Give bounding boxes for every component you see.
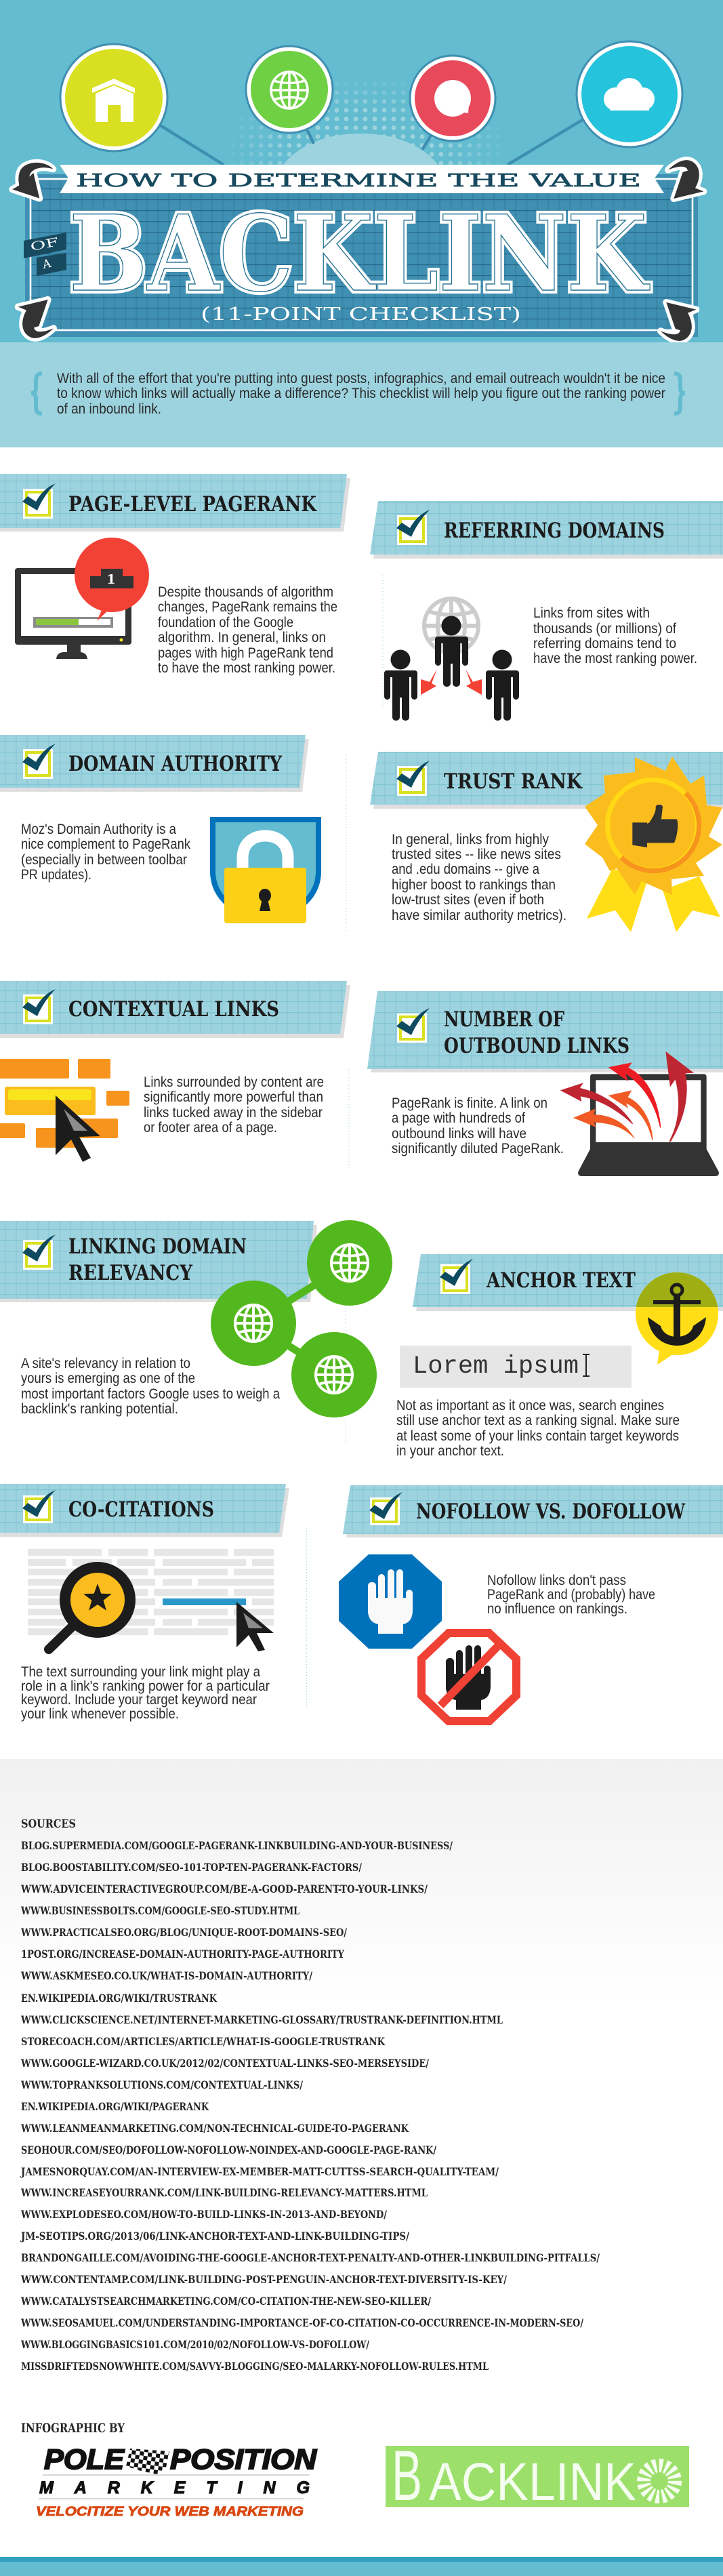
sources list	[20, 1839, 600, 2373]
text block: in your anchor text.	[396, 1443, 504, 1459]
icon: laptop with outbound arrows	[560, 1051, 719, 1176]
text block: PageRank is finite. A link on	[392, 1095, 548, 1111]
sources list: WWW.CONTENTAMP.COM/LINK-BUILDING-POST-PENGUIN-ANCHOR-TEXT-DIVERSITY-IS-KEY/	[20, 2273, 507, 2286]
text block: Not as important as it once was, search engines	[396, 1398, 664, 1413]
text block	[21, 822, 190, 883]
banner	[0, 1221, 317, 1302]
title tag: of a: OF	[29, 235, 60, 254]
text block: Links from sites with	[533, 605, 650, 621]
text block: pages with high PageRank tend	[158, 645, 333, 661]
text block: to have the most ranking power.	[158, 660, 335, 676]
intro text: With all of the effort that you're putting into guest posts, infographics, and email outreach wouldn't it be nice	[57, 371, 665, 386]
sources list: WWW.PRACTICALSEO.ORG/BLOG/UNIQUE-ROOT-DOMAINS-SEO/	[20, 1926, 347, 1939]
sources list: MISSDRIFTEDSNOWWHITE.COM/SAVVY-BLOGGING/SEO-MALARKY-NOFOLLOW-RULES.HTML	[21, 2360, 489, 2373]
intro text	[57, 371, 665, 417]
text block: outbound links will have	[392, 1126, 526, 1142]
text block: changes, PageRank remains the	[158, 599, 337, 615]
banner: PAGE-LEVEL PAGERANK	[68, 492, 317, 517]
sources list: EN.WIKIPEDIA.ORG/WIKI/PAGERANK	[21, 2100, 209, 2113]
panel: trust rank	[370, 752, 723, 932]
text block: your link whenever possible.	[21, 1706, 179, 1722]
panel: anchor text	[396, 1254, 723, 1459]
text block: In general, links from highly	[392, 832, 549, 847]
text block: and .edu domains -- give a	[392, 862, 539, 877]
panel: credits	[21, 2421, 689, 2519]
logo: pole position marketing: POLE	[44, 2443, 125, 2475]
panel: co-citations	[0, 1484, 289, 1722]
text block: low-trust sites (even if both	[392, 892, 544, 908]
banner	[413, 1254, 723, 1311]
text block: have the most ranking power.	[533, 651, 697, 666]
arrow: corner bottom left	[18, 300, 54, 338]
text block: higher boost to rankings than	[392, 877, 556, 893]
text block: Moz's Domain Authority is a	[21, 822, 176, 837]
sources list: EN.WIKIPEDIA.ORG/WIKI/TRUSTRANK	[21, 1992, 217, 2005]
banner: CO-CITATIONS	[68, 1497, 214, 1522]
input mockup: Lorem ipsum	[413, 1352, 579, 1381]
icon: cloud circle	[577, 41, 682, 147]
icon: connected globes	[211, 1220, 392, 1417]
title tag: of a	[24, 233, 66, 276]
banner	[367, 991, 723, 1072]
sources list: WWW.GOOGLE-WIZARD.CO.UK/2012/02/CONTEXTUAL-LINKS-SEO-MERSEYSIDE/	[20, 2057, 429, 2070]
sources list: SEOHOUR.COM/SEO/DOFOLLOW-NOFOLLOW-NOINDEX-AND-GOOGLE-PAGE-RANK/	[21, 2144, 436, 2156]
text block: significantly diluted PageRank.	[392, 1141, 564, 1156]
sources list: WWW.SEOSAMUEL.COM/UNDERSTANDING-IMPORTANCE-OF-CO-CITATION-CO-OCCURRENCE-IN-MODERN-SEO/	[20, 2316, 583, 2329]
sources list: WWW.BLOGGINGBASICS101.COM/2010/02/NOFOLLOW-VS-DOFOLLOW/	[20, 2338, 369, 2351]
sources list: JM-SEOTIPS.ORG/2013/06/LINK-ANCHOR-TEXT-AND-LINK-BUILDING-TIPS/	[20, 2230, 409, 2242]
banner	[0, 735, 309, 792]
sources list: 1POST.ORG/INCREASE-DOMAIN-AUTHORITY-PAGE-AUTHORITY	[21, 1948, 345, 1960]
text block: still use anchor text as a ranking signal. Make sure	[396, 1413, 680, 1428]
icon: shield and padlock	[210, 817, 321, 923]
text block: Despite thousands of algorithm	[158, 584, 333, 600]
banner: RELEVANCY	[68, 1261, 193, 1285]
text block	[21, 1664, 270, 1722]
sources list: BLOG.SUPERMEDIA.COM/GOOGLE-PAGERANK-LINKBUILDING-AND-YOUR-BUSINESS/	[21, 1839, 453, 1852]
sources list: WWW.EXPLODESEO.COM/HOW-TO-BUILD-LINKS-IN-2013-AND-BEYOND/	[20, 2208, 387, 2221]
text block: no influence on rankings.	[487, 1601, 627, 1617]
right brace	[674, 374, 685, 414]
credits heading: INFOGRAPHIC BY	[21, 2421, 125, 2436]
sources list: BLOG.BOOSTABILITY.COM/SEO-101-TOP-TEN-PAGERANK-FACTORS/	[21, 1861, 362, 1874]
text block	[487, 1573, 655, 1617]
icon: anchor bubble	[636, 1272, 718, 1365]
panel: intro	[0, 342, 723, 447]
sources heading: SOURCES	[21, 1817, 76, 1831]
input mockup	[400, 1346, 632, 1388]
icon: chat circle	[410, 56, 495, 141]
arrow: corner top left	[12, 163, 53, 199]
banner	[370, 752, 723, 809]
logo: pole position marketing: POSITION	[170, 2443, 318, 2475]
text block	[392, 832, 566, 923]
text block: nice complement to PageRank	[21, 837, 190, 852]
text block	[21, 1356, 280, 1417]
icon: home circle	[60, 44, 167, 151]
text block	[158, 584, 337, 676]
panel: sources	[0, 1759, 723, 2373]
logo: pole position marketing: VELOCITIZE YOUR WEB MARKETING	[36, 2505, 304, 2519]
icon: text lines with magnifier and cursor	[28, 1549, 274, 1651]
text block	[392, 1095, 564, 1156]
banner	[0, 1484, 289, 1537]
title: backlink: BACKLINK	[69, 193, 650, 315]
sources list: WWW.TOPRANKSOLUTIONS.COM/CONTEXTUAL-LINKS/	[20, 2078, 303, 2091]
sources list: WWW.CLICKSCIENCE.NET/INTERNET-MARKETING-GLOSSARY/TRUSTRANK-DEFINITION.HTML	[20, 2013, 503, 2026]
text block: referring domains tend to	[533, 636, 676, 651]
sources list: WWW.BUSINESSBOLTS.COM/GOOGLE-SEO-STUDY.HTML	[20, 1904, 299, 1917]
panel: number of outbound links	[367, 991, 723, 1176]
text block: thousands (or millions) of	[533, 621, 676, 637]
banner	[370, 501, 723, 559]
icon: content blocks and cursor	[0, 1059, 129, 1162]
banner	[0, 474, 350, 531]
banner: OUTBOUND LINKS	[444, 1034, 629, 1058]
text block	[396, 1398, 680, 1459]
banner: ANCHOR TEXT	[486, 1268, 636, 1293]
banner: CONTEXTUAL LINKS	[68, 997, 279, 1022]
text block: The text surrounding your link might play a	[21, 1664, 260, 1680]
text block	[144, 1074, 324, 1135]
text block: significantly more powerful than	[144, 1089, 323, 1105]
text block: trusted sites -- like news sites	[392, 847, 561, 862]
banner: NUMBER OF	[444, 1007, 564, 1032]
panel: page-level pagerank	[0, 474, 350, 676]
dome	[283, 134, 438, 165]
panel: domain authority	[0, 735, 321, 923]
logo: backlinko	[386, 2436, 689, 2516]
halftone dots	[232, 81, 500, 165]
sources list: STORECOACH.COM/ARTICLES/ARTICLE/WHAT-IS-GOOGLE-TRUSTRANK	[21, 2035, 385, 2048]
text block: or footer area of a page.	[144, 1120, 277, 1135]
icon: people and globe	[384, 599, 519, 721]
panel: contextual links	[0, 981, 350, 1162]
icon: award seal with thumb	[585, 757, 722, 932]
sources list: WWW.ADVICEINTERACTIVEGROUP.COM/BE-A-GOOD-PARENT-TO-YOUR-LINKS/	[20, 1883, 428, 1895]
banner: DOMAIN AUTHORITY	[68, 752, 283, 776]
icon: globe circle	[246, 46, 333, 133]
arrow: corner top right	[668, 160, 703, 199]
subtitle: (11-POINT CHECKLIST)	[201, 304, 521, 325]
text block: Links surrounded by content are	[144, 1074, 324, 1090]
banner: REFERRING DOMAINS	[444, 519, 665, 543]
text block: most important factors Google uses to weigh a	[21, 1386, 280, 1402]
logo: pole position marketing	[36, 2443, 318, 2519]
text block: a page with hundreds of	[392, 1110, 525, 1126]
title tag: of a: A	[41, 257, 53, 272]
sources list: BRANDONGAILLE.COM/AVOIDING-THE-GOOGLE-ANCHOR-TEXT-PENALTY-AND-OTHER-LINKBUILDING-PITFALLS/	[21, 2251, 600, 2264]
title sign	[24, 165, 698, 337]
text block	[533, 605, 697, 666]
banner: TRUST RANK	[444, 769, 583, 794]
panel: nofollow vs dofollow	[339, 1485, 723, 1721]
panel: linking domain relevancy	[0, 1220, 392, 1417]
text block: foundation of the Google	[158, 615, 293, 630]
text block: backlink's ranking potential.	[21, 1401, 178, 1417]
text block: at least some of your links contain target keywords	[396, 1428, 679, 1444]
icon: monitor with ranking badge: 1	[106, 572, 116, 587]
sources list: WWW.ASKMESEO.CO.UK/WHAT-IS-DOMAIN-AUTHORITY/	[20, 1969, 312, 1982]
logo: pole position marketing: MARKETING	[39, 2478, 310, 2497]
connector lines	[159, 119, 583, 165]
sources list: WWW.INCREASEYOURRANK.COM/LINK-BUILDING-RELEVANCY-MATTERS.HTML	[20, 2186, 428, 2199]
icon: red no-hand sign	[421, 1633, 516, 1721]
icon: monitor with ranking badge	[15, 538, 149, 659]
panel: header	[0, 0, 723, 342]
icon: blue stop hand	[339, 1554, 442, 1649]
left brace	[31, 374, 42, 414]
logo: backlinko: B	[392, 2436, 422, 2516]
text block: (especially in between toolbar	[21, 852, 187, 868]
footer band	[0, 2557, 723, 2576]
intro text: to know which links will actually make a difference? This checklist will help you figure out the ranking power	[57, 386, 665, 401]
sources list: WWW.LEANMEANMARKETING.COM/NON-TECHNICAL-GUIDE-TO-PAGERANK	[20, 2122, 409, 2135]
title ribbon	[60, 165, 664, 193]
text block: links tucked away in the sidebar	[144, 1105, 323, 1121]
panel: referring domains	[370, 501, 723, 721]
text block: PageRank and (probably) have	[487, 1587, 655, 1603]
text block: yours is emerging as one of the	[21, 1371, 195, 1386]
text block: A site's relevancy in relation to	[21, 1356, 190, 1371]
sources list: JAMESNORQUAY.COM/AN-INTERVIEW-EX-MEMBER-MATT-CUTTSS-SEARCH-QUALITY-TEAM/	[20, 2165, 499, 2178]
logo: backlinko: ACKLINK	[429, 2451, 636, 2512]
text block: Nofollow links don't pass	[487, 1573, 626, 1588]
text block: algorithm. In general, links on	[158, 630, 326, 645]
title: backlink: BACKLINK	[69, 193, 650, 315]
banner: LINKING DOMAIN	[68, 1234, 247, 1259]
banner	[343, 1485, 723, 1537]
text block: have similar authority metrics).	[392, 908, 566, 923]
title ribbon: HOW TO DETERMINE THE VALUE	[76, 171, 641, 191]
intro text: of an inbound link.	[57, 401, 161, 417]
arrow: corner bottom right	[661, 302, 696, 341]
banner	[0, 981, 350, 1038]
sources list: WWW.CATALYSTSEARCHMARKETING.COM/CO-CITATION-THE-NEW-SEO-KILLER/	[20, 2295, 431, 2308]
text block: PR updates).	[21, 867, 91, 883]
text block: keyword. Include your target keyword near	[21, 1692, 257, 1708]
text block: role in a link's ranking power for a particular	[21, 1678, 270, 1694]
